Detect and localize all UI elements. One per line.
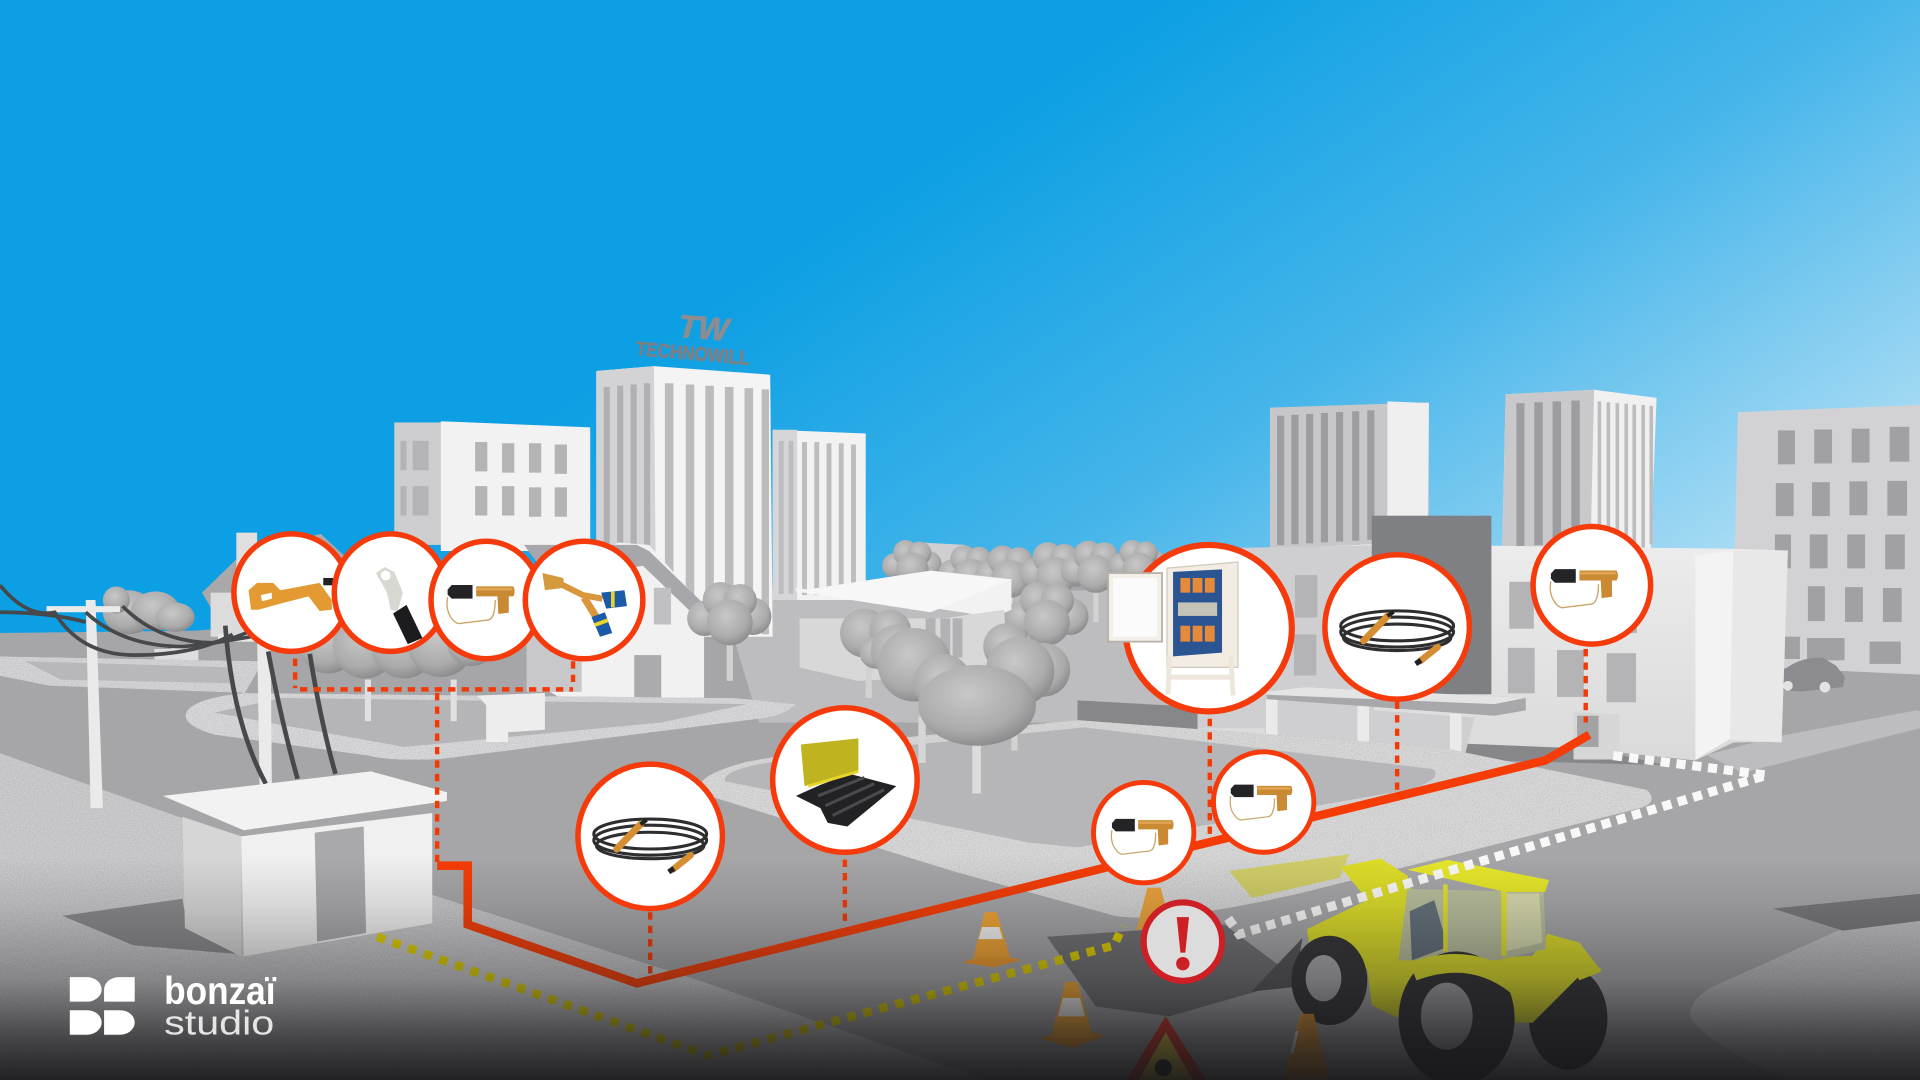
- cone 2: [1041, 982, 1106, 1048]
- product circle: cable ramp: [773, 708, 917, 852]
- back-left trees and houses: [103, 533, 1089, 710]
- logo mark: [70, 977, 135, 1035]
- red cable path: [437, 735, 1589, 983]
- buildings: right skyline (zoomed coordinates): [1198, 390, 1920, 773]
- product circle: cable lug: [334, 534, 447, 651]
- wordmark: studio: studio: [164, 1005, 274, 1043]
- shadow: box: [62, 899, 236, 954]
- block: bottom left pavement: [0, 753, 986, 1080]
- building: Technowill tower: [596, 366, 773, 637]
- pole: left: [47, 600, 120, 808]
- garage building: [796, 571, 1011, 681]
- building: tower annex: [773, 430, 866, 600]
- connector leaders: [295, 649, 1586, 973]
- product circle: distribution panel: [1108, 545, 1292, 711]
- road works hole: [1047, 924, 1298, 1016]
- cone 3: [1136, 888, 1169, 931]
- ground and roads: [0, 573, 1920, 1080]
- tractor body: [1307, 859, 1602, 1023]
- exclamation mark: [1177, 917, 1189, 953]
- panel icon: [1108, 562, 1238, 696]
- alert marker: [1144, 902, 1222, 981]
- splitter icon: [542, 573, 627, 637]
- product circle: elbow plug: [431, 541, 541, 659]
- tree cluster left: [103, 587, 195, 634]
- logo mark: TW: [677, 308, 733, 348]
- parked car: [1783, 658, 1845, 692]
- shadow: right building: [1773, 894, 1920, 931]
- wordmark: bonzai: bonzaï: [164, 970, 277, 1013]
- tower A: [1270, 401, 1429, 550]
- product circle: plug building: [1533, 527, 1651, 644]
- clamp icon: [249, 578, 333, 611]
- front wheel: [1291, 936, 1367, 1025]
- front fender: [1546, 934, 1602, 980]
- pole: right: [218, 634, 272, 786]
- plug icon: [1550, 569, 1618, 608]
- bonzai studio logo: [70, 970, 277, 1043]
- rear wheel: [1399, 951, 1528, 1080]
- cone 4: [1283, 1014, 1330, 1080]
- company name: TECHNOWILL: [635, 338, 750, 370]
- product circle: clamp: [234, 534, 349, 651]
- plug icon: [1111, 819, 1174, 854]
- loader bucket: [1229, 854, 1349, 898]
- bottom dark vignette: [0, 796, 1920, 1080]
- product circle: splitter: [525, 541, 643, 659]
- block: far left: [0, 656, 263, 693]
- block: house lot: [185, 693, 796, 760]
- rear bucket shadow: [1251, 938, 1303, 992]
- alert ring: [1144, 902, 1222, 981]
- house: left: [202, 533, 355, 637]
- box roof: [163, 771, 447, 830]
- tree row behind bollards: [299, 611, 496, 721]
- far central tree: [840, 609, 911, 698]
- lug icon: [376, 567, 422, 644]
- small roadside kiosks: [154, 647, 198, 676]
- product circle: cable reel right: [1325, 555, 1469, 699]
- low office building: [1198, 516, 1788, 760]
- far rear wheel: [1529, 967, 1607, 1070]
- white dashed route: [1228, 756, 1767, 934]
- box front face: [241, 813, 432, 956]
- product circle: cable reel left: [578, 764, 722, 909]
- central trees: [299, 609, 1070, 793]
- product circle: plug small left: [1093, 782, 1194, 883]
- far trees behind the city: [882, 540, 1168, 627]
- building: left apartment block: [394, 421, 590, 551]
- box door: [315, 827, 366, 942]
- right lot: [1707, 710, 1920, 773]
- utility cabinet: [1574, 711, 1620, 759]
- product circle: plug small right: [1213, 752, 1314, 852]
- utility poles and overhead cables: [0, 585, 336, 808]
- plug icon: [1230, 785, 1292, 820]
- traffic cones: [962, 888, 1330, 1080]
- cables: [0, 585, 336, 784]
- cones by tractor: [1291, 1014, 1325, 1063]
- cone 1: [962, 912, 1021, 967]
- road sign: [1127, 1016, 1206, 1080]
- substation box: [163, 771, 447, 956]
- entrance canopy: [1265, 687, 1526, 762]
- sign: Technowill logo: [635, 304, 753, 370]
- plug icon: [447, 585, 515, 624]
- block: right front: [1690, 894, 1920, 1080]
- ramp icon: [796, 738, 896, 827]
- cable icon: [594, 819, 707, 872]
- big central tree: [871, 623, 1070, 793]
- cable icon: [1341, 611, 1454, 664]
- tower B: [1502, 390, 1657, 550]
- block: central island: [700, 720, 1652, 918]
- yellow dashed route: [377, 926, 1123, 1056]
- tractor cabin: [1399, 860, 1549, 960]
- tractor: [1229, 854, 1607, 1080]
- tower C with windows: [1732, 405, 1920, 675]
- box left face: [182, 817, 241, 956]
- house: right: [524, 542, 716, 710]
- sidewalk blocks: [0, 656, 1920, 1080]
